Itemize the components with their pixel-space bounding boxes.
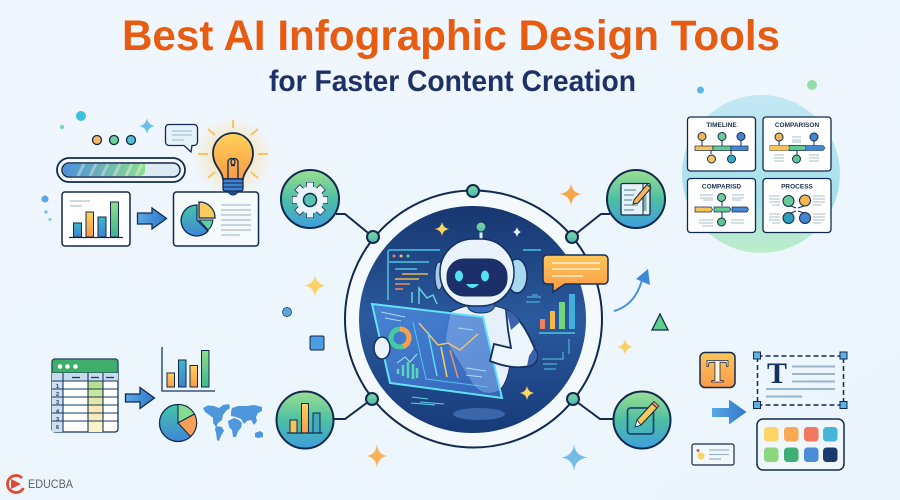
backdrop circle [682,95,840,253]
outer ring [345,190,602,448]
panel: central hub network [331,185,616,448]
sparkle: blue bottom [561,444,588,471]
disc sparkles [435,222,449,236]
spreadsheet: 3 [56,417,59,423]
shadow under robot [453,408,505,420]
card: bar chart [62,192,130,246]
dark centre disc [359,206,586,433]
icon: letter T: T [706,354,729,390]
small card [692,444,734,465]
spreadsheet: 4 [56,409,60,415]
robot neck [467,303,495,313]
three dots [92,136,136,144]
sparkle: orange bottom [366,444,388,468]
chat bubble [166,124,198,152]
ring nodes [366,185,579,405]
title: Best AI Infographic Design Tools [122,12,780,60]
connector lines [331,214,616,419]
square: blue [310,336,324,350]
subtitle: for Faster Content Creation [269,65,636,98]
card: process [763,178,831,232]
panel: bottom right typography [692,352,847,470]
decorative dots [697,86,704,94]
sparkle: yellow left [304,275,326,297]
bar chart [162,347,215,391]
text selection box: T [767,357,787,390]
sparkle: orange top [559,183,582,206]
triangle: green [652,314,668,330]
robot tablet [372,304,502,398]
icon: gear circle [281,170,339,228]
icon: edit square circle [614,392,670,448]
colour palette [757,419,844,470]
spreadsheet: 2 [56,392,59,398]
robot hand left [374,337,390,359]
world map [203,404,263,441]
card: timeline [688,117,756,171]
progress bar [57,158,185,182]
card: comparison [763,117,831,171]
arrow [126,388,154,408]
card: comparisd [688,178,756,232]
card: timeline: TIMELINE [706,122,737,129]
speech bubble [543,255,608,292]
logo: EDUCBA: EDUCBA [28,479,73,491]
icon: letter T [700,352,735,390]
arrow [712,400,746,424]
card: pie chart report [174,192,258,246]
spreadsheet: 3 [56,400,59,406]
centre bar chart [526,294,575,369]
sparkle [139,118,155,134]
panel: top left insights [42,111,273,246]
text selection box [754,352,847,408]
icon: bar chart circle [276,392,334,448]
code window [388,250,541,304]
robot head [435,222,527,306]
icon: light bulb [193,117,273,197]
panel: top right templates [682,80,840,253]
sparkle: yellow right [617,339,633,355]
pie chart [160,404,197,442]
arrow [138,208,166,229]
logo: EDUCBA [7,476,73,493]
robot arm [490,310,537,367]
card: process: PROCESS [781,184,814,190]
arrow: growth [614,269,650,311]
spreadsheet: 1 [56,384,59,390]
dot: blue [282,308,292,316]
card: comparison: COMPARISON [775,122,819,129]
panel: bottom left data [52,347,263,442]
spreadsheet [52,359,118,432]
spreadsheet: 6 [56,425,59,431]
robot torso [445,304,512,394]
decorative dots [42,111,86,221]
card: comparisd: COMPARISD [702,184,741,190]
icon: document and pencil circle [607,170,665,228]
